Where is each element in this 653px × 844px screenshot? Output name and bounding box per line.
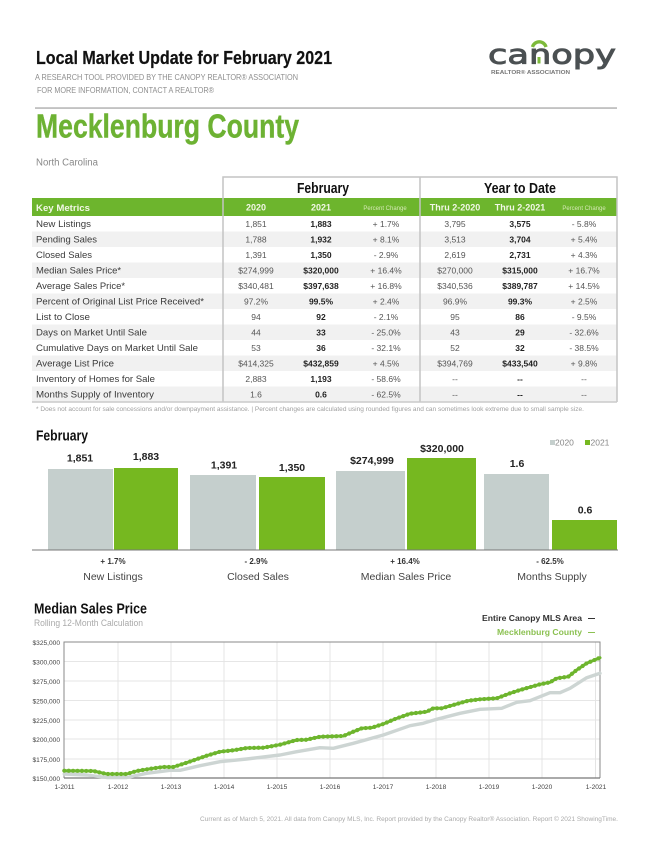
row: Cumulative Days on Market Until Sale: 36 <box>316 343 326 353</box>
row: Months Supply of Inventory: -- <box>452 390 458 400</box>
bar group: Months Supply: Months Supply <box>517 571 587 583</box>
bar group: Median Sales Price: + 16.4% <box>390 557 420 566</box>
row: Inventory of Homes for Sale: Inventory of Homes for Sale <box>36 374 155 385</box>
row: Closed Sales: Closed Sales <box>36 250 92 261</box>
bar chart legend: 2021 <box>590 438 610 448</box>
bar group: Closed Sales: - 2.9% <box>244 557 268 566</box>
row: Months Supply of Inventory: -- <box>517 390 523 400</box>
x axis labels: 1-2012 <box>108 784 129 791</box>
row: Median Sales Price: $270,000 <box>437 266 473 276</box>
line chart legend: Entire Canopy MLS Area <box>482 613 582 623</box>
logo: canopy <box>488 40 616 76</box>
row: Cumulative Days on Market Until Sale <box>36 343 599 354</box>
table green header row: 2021 <box>311 202 331 212</box>
bar group: New Listings: New Listings <box>83 571 143 583</box>
row: Median Sales Price: $320,000 <box>303 266 339 276</box>
line: Mecklenburg County <box>64 658 600 774</box>
row: List to Close: 94 <box>251 312 261 322</box>
row: Cumulative Days on Market Until Sale: 52 <box>450 343 460 353</box>
table green header row: Percent Change <box>562 206 606 212</box>
row: Inventory of Homes for Sale: 2,883 <box>245 374 267 384</box>
row: Pending Sales: + 5.4% <box>571 234 598 244</box>
row: Cumulative Days on Market Until Sale: - 38.5% <box>569 343 599 353</box>
row: New Listings: - 5.8% <box>572 219 597 229</box>
row: List to Close <box>36 312 597 323</box>
line chart legend <box>482 613 595 637</box>
bar group: Closed Sales <box>190 460 325 583</box>
row: Average Sales Price <box>36 281 600 292</box>
state label: North Carolina <box>36 158 98 168</box>
table green header row: Thru 2-2020 <box>430 202 480 212</box>
row: Median Sales Price: $274,999 <box>238 266 274 276</box>
row: List to Close: 92 <box>316 312 326 322</box>
row: Median Sales Price: + 16.4% <box>370 266 402 276</box>
bar group: New Listings: 1,851 <box>67 452 93 464</box>
row: Percent of Original List Price Received: 97.2% <box>244 296 268 306</box>
row: Inventory of Homes for Sale <box>36 374 587 385</box>
row: New Listings: 3,795 <box>444 219 466 229</box>
row: Pending Sales: 1,932 <box>310 234 332 244</box>
row: New Listings: 1,851 <box>245 219 267 229</box>
header section <box>35 40 617 168</box>
title: Local Market Update for February 2021 <box>36 48 332 68</box>
table green header row: 2020 <box>246 202 266 212</box>
row: Days on Market Until Sale <box>36 328 599 338</box>
table green header row <box>32 198 617 216</box>
bar group: New Listings: + 1.7% <box>100 557 126 566</box>
line chart legend: Mecklenburg County <box>497 627 582 637</box>
row: Median Sales Price: Median Sales Price* <box>36 266 121 276</box>
row: Median Sales Price <box>36 266 600 276</box>
row: Days on Market Until Sale: 43 <box>450 328 460 338</box>
row: New Listings: + 1.7% <box>373 219 400 229</box>
y axis labels: $150,000 <box>32 776 60 783</box>
table group headers: Year to Date <box>484 180 556 197</box>
bar group: Closed Sales: 1,350 <box>279 462 305 474</box>
row: Pending Sales <box>36 234 598 246</box>
row: Closed Sales: 2,731 <box>509 250 531 260</box>
row: Days on Market Until Sale: - 25.0% <box>371 328 401 338</box>
x axis labels: 1-2011 <box>54 784 75 791</box>
row: Days on Market Until Sale: Days on Market Until Sale <box>36 328 147 338</box>
x axis labels: 1-2015 <box>267 784 288 791</box>
row: Percent of Original List Price Received <box>36 296 598 308</box>
subtitle lines <box>35 72 298 95</box>
line chart heading: Median Sales Price <box>34 600 147 618</box>
y axis labels: $325,000 <box>32 640 60 647</box>
bar group: New Listings: 1,883 <box>133 451 159 463</box>
y axis labels: $175,000 <box>32 757 60 764</box>
bar group: Months Supply: 0.6 <box>578 504 592 516</box>
bar group: Closed Sales: 1,391 <box>211 460 237 472</box>
footer note: Current as of March 5, 2021. All data from Canopy MLS, Inc. Report provided by the Canopy Realtor® Association. Report © 2021 ShowingTime. <box>200 816 618 823</box>
bar group: Median Sales Price <box>336 443 476 583</box>
row: Average List Price: + 9.8% <box>571 358 598 368</box>
table green header row: Key Metrics <box>36 203 90 214</box>
row: List to Close: List to Close <box>36 312 90 323</box>
table green header row: Percent Change <box>363 206 407 212</box>
row: Months Supply of Inventory: - 62.5% <box>371 390 401 400</box>
row: Days on Market Until Sale: 33 <box>316 328 326 338</box>
row: Average Sales Price: + 14.5% <box>568 281 600 291</box>
bar chart legend: 2020 <box>555 438 574 448</box>
y axis labels: $275,000 <box>32 679 60 686</box>
subtitle lines: FOR MORE INFORMATION, CONTACT A REALTOR® <box>37 85 215 95</box>
row: Inventory of Homes for Sale: - 58.6% <box>371 374 401 384</box>
row: Average Sales Price: $340,536 <box>437 281 473 291</box>
row: Closed Sales <box>36 250 598 261</box>
row: Closed Sales: - 2.9% <box>374 250 399 260</box>
bar chart legend <box>550 438 610 448</box>
row: Closed Sales: 1,391 <box>245 250 267 260</box>
y axis labels: $300,000 <box>32 660 60 666</box>
row: Pending Sales: Pending Sales <box>36 234 97 246</box>
row: Cumulative Days on Market Until Sale: Cumulative Days on Market Until Sale <box>36 343 198 354</box>
table group headers: February <box>297 180 350 197</box>
row: Months Supply of Inventory: 1.6 <box>250 390 262 400</box>
county heading: Mecklenburg County <box>36 108 300 144</box>
row: Percent of Original List Price Received: 96.9% <box>443 296 467 306</box>
row: Pending Sales: + 8.1% <box>373 234 400 244</box>
row: Pending Sales: 3,704 <box>509 234 531 244</box>
bar group: Months Supply <box>484 458 617 583</box>
bar group: New Listings <box>48 451 178 583</box>
row: Cumulative Days on Market Until Sale: - 32.1% <box>371 343 401 353</box>
row: Closed Sales: + 4.3% <box>571 250 598 260</box>
bar group: Median Sales Price: $320,000 <box>420 443 464 455</box>
row: Percent of Original List Price Received: 99.3% <box>508 296 532 306</box>
line chart: Median Sales Price <box>32 600 607 791</box>
row: Cumulative Days on Market Until Sale: 53 <box>251 343 261 353</box>
row: Percent of Original List Price Received: + 2.4% <box>373 296 400 306</box>
row: Average Sales Price: $340,481 <box>238 281 274 291</box>
table footnote: * Does not account for sale concessions and/or downpayment assistance. | Percent changes are calculated using rounded figures and can sometimes look extreme due to small sample size. <box>36 407 584 413</box>
x axis labels: 1-2020 <box>532 784 553 791</box>
row: Average Sales Price: Average Sales Price* <box>36 281 125 292</box>
table green header row: Thru 2-2021 <box>495 202 545 212</box>
row: List to Close: 86 <box>515 312 525 322</box>
row: Median Sales Price: + 16.7% <box>568 266 600 276</box>
row: Inventory of Homes for Sale: -- <box>452 374 458 384</box>
row: Months Supply of Inventory: -- <box>581 390 587 400</box>
x axis labels: 1-2016 <box>320 784 341 791</box>
bar group: Months Supply: - 62.5% <box>536 557 564 566</box>
x axis labels: 1-2014 <box>214 784 235 791</box>
row: Months Supply of Inventory <box>36 390 587 400</box>
row: Median Sales Price: $315,000 <box>502 266 538 276</box>
row: Inventory of Homes for Sale: -- <box>581 374 587 384</box>
line: Entire Canopy MLS Area <box>64 673 600 778</box>
line chart subtitle: Rolling 12-Month Calculation <box>34 618 143 628</box>
row: List to Close: - 2.1% <box>374 312 399 322</box>
row: New Listings: 1,883 <box>310 219 332 229</box>
x axis labels: 1-2018 <box>426 784 447 791</box>
bar chart heading: February <box>36 428 89 444</box>
bar group: Closed Sales: Closed Sales <box>227 571 289 583</box>
row: Average Sales Price: + 16.8% <box>370 281 402 291</box>
row: Average Sales Price: $397,638 <box>303 281 339 291</box>
row: Average List Price: $414,325 <box>238 358 274 368</box>
row: Percent of Original List Price Received: + 2.5% <box>571 296 598 306</box>
y axis labels <box>32 640 60 783</box>
row: Average List Price: + 4.5% <box>373 358 400 368</box>
row: Days on Market Until Sale: - 32.6% <box>569 328 599 338</box>
row: Closed Sales: 1,350 <box>310 250 332 260</box>
row: Months Supply of Inventory: 0.6 <box>315 390 327 400</box>
x axis labels <box>54 784 607 791</box>
subtitle lines: A RESEARCH TOOL PROVIDED BY THE CANOPY REALTOR® ASSOCIATION <box>35 72 298 82</box>
row: Days on Market Until Sale: 29 <box>515 328 525 338</box>
row: Closed Sales: 2,619 <box>444 250 466 260</box>
row: Average List Price: Average List Price <box>36 358 114 370</box>
row: Average List Price: $432,859 <box>303 358 339 368</box>
row: Months Supply of Inventory: Months Supply of Inventory <box>36 390 154 400</box>
row: Days on Market Until Sale: 44 <box>251 328 261 338</box>
row: Average List Price: $433,540 <box>502 358 538 368</box>
logo: canopy: REALTOR® ASSOCIATION <box>491 69 570 76</box>
row: New Listings: New Listings <box>36 219 91 230</box>
x axis labels: 1-2021 <box>586 784 607 791</box>
row: Average Sales Price: $389,787 <box>502 281 538 291</box>
row: Average List Price: $394,769 <box>437 358 473 368</box>
y axis labels: $225,000 <box>32 718 60 725</box>
row: Cumulative Days on Market Until Sale: 32 <box>515 343 525 353</box>
row: Percent of Original List Price Received: Percent of Original List Price Received* <box>36 296 204 308</box>
row: List to Close: 95 <box>450 312 460 322</box>
row: Average List Price <box>36 358 598 370</box>
key metrics table <box>32 177 617 402</box>
bar chart: February <box>32 428 618 583</box>
row: Pending Sales: 3,513 <box>444 234 466 244</box>
x axis labels: 1-2017 <box>373 784 394 791</box>
row: Inventory of Homes for Sale: -- <box>517 374 523 384</box>
row: New Listings <box>36 219 597 230</box>
row: New Listings: 3,575 <box>509 219 531 229</box>
table group headers <box>297 180 556 197</box>
row: List to Close: - 9.5% <box>572 312 597 322</box>
bar group: Median Sales Price: Median Sales Price <box>361 571 451 583</box>
y axis labels: $200,000 <box>32 737 60 744</box>
x axis labels: 1-2019 <box>479 784 500 791</box>
bar group: Median Sales Price: $274,999 <box>350 455 394 467</box>
row: Percent of Original List Price Received: 99.5% <box>309 296 333 306</box>
y axis labels: $250,000 <box>32 698 60 706</box>
row: Pending Sales: 1,788 <box>245 234 267 244</box>
bar group: Months Supply: 1.6 <box>510 458 524 470</box>
logo: canopy: canopy <box>488 40 616 70</box>
row: Inventory of Homes for Sale: 1,193 <box>310 374 332 384</box>
x axis labels: 1-2013 <box>161 784 182 791</box>
